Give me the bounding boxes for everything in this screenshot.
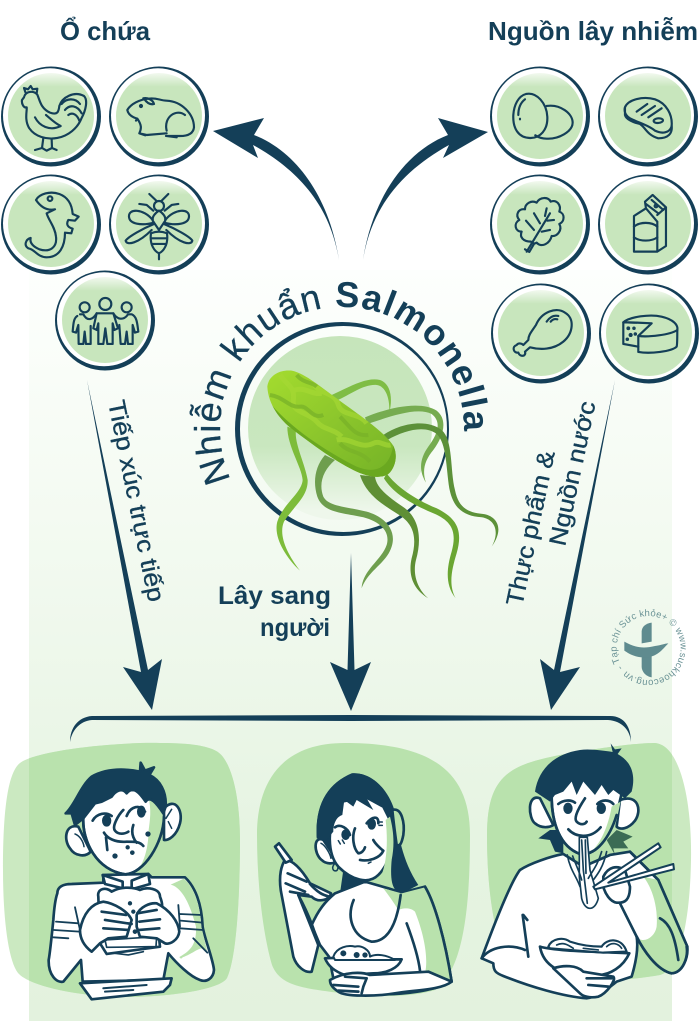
green disc (248, 336, 432, 520)
figure (49, 763, 214, 999)
icon: cheese (599, 284, 699, 384)
heading: infection sources: Nguồn lây nhiễm (488, 16, 698, 46)
icon: chicken drumstick (491, 284, 591, 384)
figure (482, 743, 687, 998)
icon: steak (598, 66, 698, 166)
blob background (257, 743, 470, 996)
blob background (487, 743, 691, 981)
label: human transmission line 2: người (260, 614, 330, 642)
bacterium with flagella (267, 371, 498, 598)
arrow: food and water (540, 380, 615, 710)
source icon circles (490, 66, 699, 384)
bracket (70, 715, 631, 742)
arrow: human transmission (330, 553, 371, 711)
icon: milk carton (598, 174, 698, 274)
watermark: - Tạp chí Sức khỏe+ © www.suckhoecong.vn (611, 609, 686, 685)
blob background (3, 743, 240, 997)
arrow: direct contact (87, 380, 162, 710)
label: direct contact: Tiếp xúc trực tiếp (102, 398, 169, 604)
title on a curve: Nhiễm khuẩn Salmonella (190, 282, 488, 485)
label: human transmission: Lây sang (218, 582, 331, 610)
icon: people (55, 270, 155, 370)
central bacterium illustration (235, 322, 498, 598)
label: food and water line 1: Thực phẩm & (501, 448, 561, 608)
icon: rooster (1, 66, 101, 166)
arrow: to sources (363, 118, 488, 260)
reservoir icon circles (1, 66, 209, 370)
icon: eggs (490, 66, 590, 166)
heading: reservoirs: Ổ chứa (60, 16, 151, 46)
figure (275, 773, 452, 996)
panel: person eating sandwich (3, 743, 240, 999)
panel: person eating noodles (482, 743, 691, 998)
icon: guinea pig (109, 66, 209, 166)
label: food and water line 2: Nguồn nước (544, 399, 601, 548)
background panel (29, 270, 672, 1021)
ring (235, 322, 449, 536)
icon: leafy vegetable (490, 174, 590, 274)
arrow: to reservoirs (213, 118, 339, 260)
panel: woman eating with spoon (257, 743, 470, 996)
icon: insect (109, 174, 209, 274)
icon: reptile (1, 174, 101, 274)
